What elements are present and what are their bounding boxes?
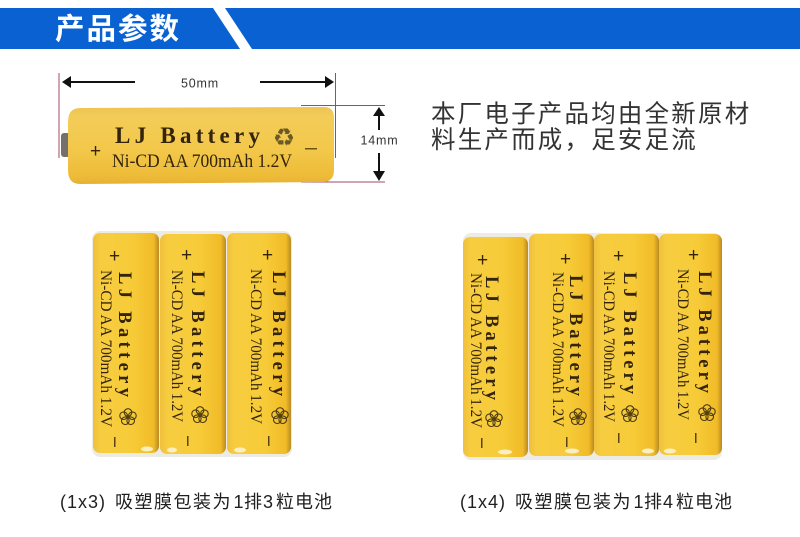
battery 3 of 3: + (262, 245, 273, 266)
battery 1 of 3 (93, 233, 159, 453)
battery 1 of 3: Ni-CD AA 700mAh 1.2V (97, 270, 114, 427)
caption: 1x4 pack: 粒电池 (676, 492, 733, 512)
battery 4 of 4: Ni-CD AA 700mAh 1.2V (674, 269, 691, 420)
arrow: height up (373, 107, 385, 130)
caption: 1x4 pack: 吸塑膜包装为 (515, 492, 632, 512)
caption: 1x4 pack: 1 (634, 492, 644, 512)
pack shadow (463, 233, 722, 460)
caption: 1x3 pack: 排 (244, 492, 262, 512)
battery 4 of 4: + (688, 245, 699, 266)
arrow: width left (62, 76, 135, 88)
battery 3 of 3 (227, 233, 291, 454)
single battery with dimensions (59, 73, 398, 184)
battery 2 of 3: + (181, 245, 192, 266)
battery 3 of 3: LJ Battery (268, 271, 288, 397)
arrow: width right (260, 76, 334, 88)
icon: battery terminal (61, 133, 70, 157)
battery 1 of 4: Ni-CD AA 700mAh 1.2V (467, 273, 484, 428)
battery 3 of 3: Ni-CD AA 700mAh 1.2V (247, 269, 264, 424)
heading: product parameters: 产品参数 (55, 13, 181, 46)
battery 1 of 3: LJ Battery (114, 272, 134, 398)
caption: 1x4 pack: 4 (663, 492, 673, 512)
battery 2 of 4: LJ Battery (565, 275, 585, 397)
arrow: height down (373, 153, 385, 181)
battery 1 of 4: + (477, 250, 488, 271)
caption: 1x4 pack: 排 (644, 492, 662, 512)
header banner (0, 8, 800, 49)
dimension lines (59, 73, 385, 182)
battery label text: ♻ (273, 123, 295, 152)
battery 1 of 4 (463, 237, 528, 457)
battery 1 of 4: LJ Battery (481, 276, 501, 401)
battery label text (90, 123, 317, 172)
battery 2 of 3 (160, 234, 226, 454)
label: 14mm: 14mm (361, 134, 398, 148)
description text: 料生产而成，足安足流 (431, 126, 698, 154)
caption: 1x3 pack: 粒电池 (276, 492, 333, 512)
caption: 1x3 pack: 3 (263, 492, 273, 512)
battery 3 of 4: LJ Battery (619, 272, 639, 395)
battery 2 of 3: LJ Battery (187, 271, 207, 397)
caption: 1x3 pack: (1x3) (60, 492, 106, 512)
pack shadow (92, 231, 292, 457)
caption: 1x4 pack: (1x4) (460, 492, 506, 512)
battery label text: + (90, 141, 101, 162)
battery 4 of 4 (659, 234, 722, 455)
battery 3 of 4: Ni-CD AA 700mAh 1.2V (600, 271, 617, 422)
battery 3 of 4 (594, 234, 659, 456)
battery 2 of 4: + (560, 249, 571, 270)
three-pack batteries (92, 231, 292, 457)
battery 2 of 4 (529, 234, 594, 456)
battery label text: Ni-CD AA 700mAh 1.2V (112, 151, 292, 172)
description text (431, 100, 751, 154)
battery 2 of 3: Ni-CD AA 700mAh 1.2V (168, 270, 185, 422)
battery 1 of 3: + (109, 246, 120, 267)
caption: 1x3 pack: 吸塑膜包装为 (115, 492, 232, 512)
label: 50mm: 50mm (181, 76, 219, 90)
battery body (68, 107, 334, 184)
battery label text: LJ Battery (115, 123, 260, 148)
four-pack batteries (463, 233, 722, 460)
caption: 1x3 pack: 1 (234, 492, 244, 512)
battery 4 of 4: LJ Battery (694, 271, 714, 394)
battery 2 of 4: Ni-CD AA 700mAh 1.2V (549, 272, 566, 427)
battery 3 of 4: + (613, 246, 624, 267)
description text: 本厂电子产品均由全新原材 (431, 100, 751, 128)
